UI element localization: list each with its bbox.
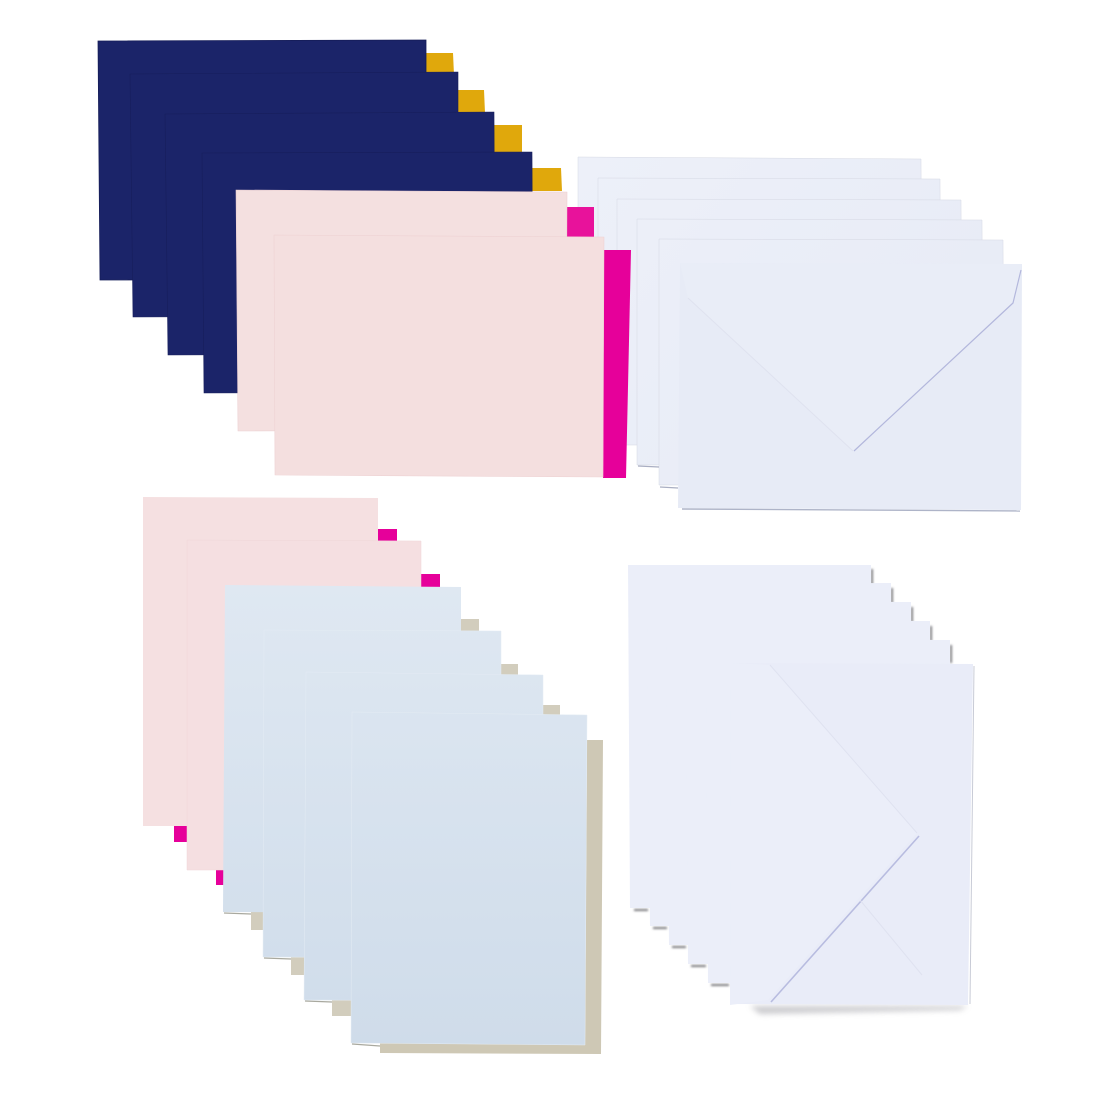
navy card 2 — [130, 72, 458, 317]
blush card rear — [236, 190, 567, 431]
group: vertical blush cards — [143, 497, 440, 885]
envelope 4 — [637, 219, 983, 465]
blue card 4 — [351, 712, 587, 1045]
envelope bottom shadow — [750, 1006, 968, 1014]
front envelope right shadow — [970, 666, 974, 1004]
envelope 3 — [617, 199, 962, 445]
envelope flap shadow — [771, 836, 919, 1002]
group: vertical white envelopes — [628, 565, 974, 1014]
front envelope bottom shadow — [682, 509, 1020, 511]
envelope 2 — [598, 178, 941, 424]
large tan card — [380, 740, 603, 1054]
group: blush and magenta cards — [236, 190, 631, 478]
blue card 2 — [263, 630, 501, 958]
navy card 4 — [202, 152, 533, 393]
front envelope — [730, 663, 973, 1005]
navy card 1 — [98, 40, 426, 280]
envelope 1 — [578, 157, 922, 402]
magenta card tabs — [174, 529, 440, 885]
envelope 5 — [659, 239, 1004, 485]
blue card shadows — [224, 913, 380, 1046]
front envelope — [678, 263, 1022, 510]
navy card 3 — [165, 112, 495, 355]
blush portrait card rear — [143, 497, 378, 826]
group: navy and gold cards — [98, 40, 562, 393]
envelope flap — [730, 663, 917, 1005]
blush portrait card front — [187, 540, 421, 870]
magenta card tab — [567, 207, 594, 237]
gold card tabs — [426, 53, 562, 191]
group: horizontal white envelopes — [578, 157, 1022, 511]
tan card tabs — [251, 619, 560, 1016]
envelope stack shadows — [634, 569, 952, 986]
magenta card back — [603, 250, 631, 478]
envelope flap edges — [688, 270, 1021, 451]
envelope stack shadows — [638, 466, 678, 488]
group: vertical blue and tan cards — [223, 585, 603, 1054]
blue card 3 — [304, 672, 543, 1001]
envelope fold lines — [770, 665, 922, 975]
blue card 1 — [223, 585, 461, 913]
envelope flap — [680, 263, 1022, 451]
envelope stack — [628, 565, 950, 983]
blush card front — [274, 235, 604, 477]
